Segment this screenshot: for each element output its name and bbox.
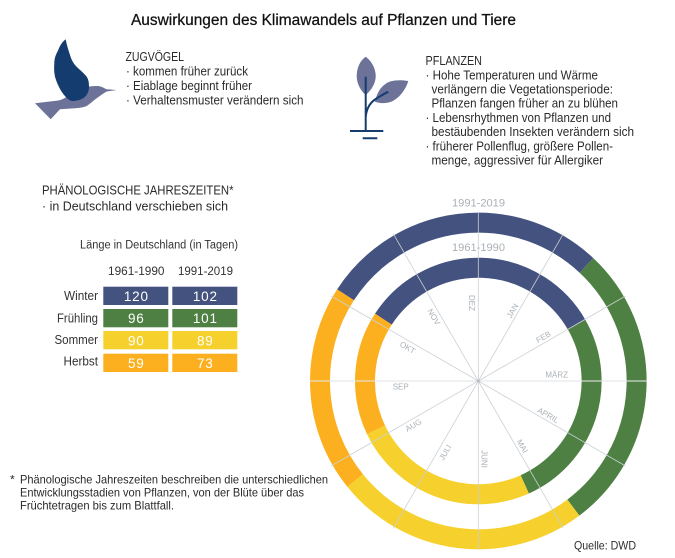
cell values: 96 [128, 311, 145, 326]
text block: Pflanzen: verlängern die Vegetationsperiode: [432, 83, 613, 97]
title: Auswirkungen des Klimawandels auf Pflanzen und Tiere [131, 12, 516, 29]
footnote: * [10, 472, 15, 486]
source: Quelle: DWD [574, 538, 636, 552]
ring label: 1991-2019: 1991-2019 [452, 198, 505, 210]
text block: Pflanzen: · Lebensrhythmen von Pflanzen und [426, 111, 611, 125]
footnote: Entwicklungsstadien von Pflanzen, von der Blüte über das [20, 485, 304, 499]
chart: season rings [310, 198, 647, 549]
row labels: Sommer [54, 333, 98, 347]
text block: Pflanzen: · Hohe Temperaturen und Wärme [426, 68, 598, 82]
month labels: JUNI [479, 450, 488, 468]
cell values: 89 [197, 333, 214, 348]
month labels: FEB [535, 329, 553, 345]
text block: Pflanzen: menge, aggressiver für Allergiker [432, 153, 603, 167]
month labels: MÄRZ [545, 370, 568, 379]
table caption: Länge in Deutschland (in Tagen) [80, 239, 238, 251]
ring: 1961-1990 [365, 268, 592, 494]
footnote [10, 472, 328, 512]
text block: Zugvögel [126, 50, 304, 108]
cells [103, 287, 237, 372]
row labels [54, 289, 98, 369]
heading: phänologische Jahreszeiten: PHÄNOLOGISCHE JAHRESZEITEN* [42, 183, 234, 197]
cell values [124, 289, 218, 371]
icon: bird [35, 39, 117, 119]
month labels [393, 295, 568, 468]
text block: Pflanzen: Pflanzen fangen früher an zu blühen [432, 97, 618, 111]
month labels: MAI [515, 438, 530, 455]
cell values: 102 [193, 289, 218, 304]
icon: plant [350, 57, 408, 138]
column headers: 1961-1990 [108, 266, 164, 278]
column headers [108, 266, 233, 278]
month spokes [310, 213, 647, 549]
month labels: OKT [398, 340, 417, 356]
text block: Zugvögel: ZUGVÖGEL [126, 50, 184, 64]
text block: Pflanzen: PFLANZEN [426, 54, 482, 68]
month labels: APRIL [536, 406, 561, 425]
footnote: Früchtetragen bis zum Blattfall. [20, 498, 174, 512]
text block: Zugvögel: · kommen früher zurück [126, 64, 249, 78]
text block: Pflanzen [426, 54, 634, 167]
cell values: 90 [128, 333, 145, 348]
row labels: Winter [64, 289, 98, 303]
month labels: DEZ [467, 295, 476, 311]
heading: phänologische Jahreszeiten: · in Deutschland verschieben sich [42, 200, 228, 214]
text block: Pflanzen: bestäubenden Insekten verändern sich [432, 125, 634, 139]
text block: Pflanzen: · früherer Pollenflug, größere Pollen- [426, 139, 613, 153]
month labels: NOV [425, 307, 442, 327]
month labels: JAN [505, 302, 521, 320]
row labels: Frühling [57, 312, 98, 326]
heading: phänologische Jahreszeiten [42, 183, 234, 214]
cell values: 73 [197, 356, 214, 371]
footnote: Phänologische Jahreszeiten beschreiben die unterschiedlichen [20, 472, 328, 486]
table: season length [54, 239, 238, 372]
row labels: Herbst [64, 355, 98, 369]
cell values: 101 [193, 311, 218, 326]
month labels: SEP [393, 383, 409, 392]
text block: Zugvögel: · Verhaltensmuster verändern sich [126, 94, 304, 108]
ring label: 1961-1990: 1961-1990 [452, 242, 505, 254]
cell values: 120 [124, 289, 149, 304]
cell values: 59 [128, 356, 145, 371]
month labels: AUG [404, 417, 423, 434]
column headers: 1991-2019 [178, 266, 233, 278]
ring: 1991-2019 [320, 223, 637, 539]
month labels: JULI [437, 443, 453, 462]
text block: Zugvögel: · Eiablage beginnt früher [126, 79, 252, 93]
